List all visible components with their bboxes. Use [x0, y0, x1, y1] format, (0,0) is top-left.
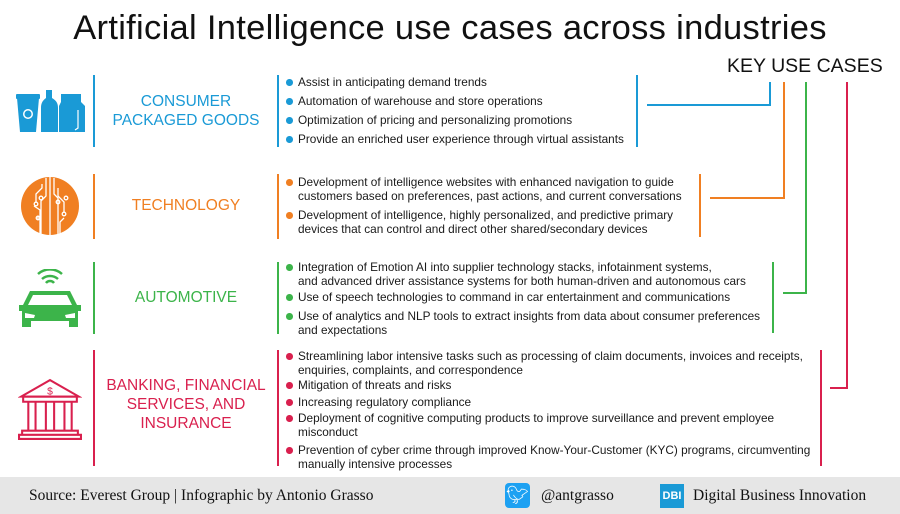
twitter handle: @antgrasso	[541, 487, 614, 504]
bullets: automotive: Use of speech technologies to command in car entertainment and communications	[298, 290, 730, 304]
bullets: cpg: Provide an enriched user experience through virtual assistants	[298, 132, 624, 146]
category label	[106, 377, 266, 432]
bullets: bfsi: Mitigation of threats and risks	[298, 378, 451, 392]
category label	[112, 93, 260, 129]
icon: dbi logo: DBI	[663, 490, 681, 502]
bullets: automotive: and expectations	[298, 323, 387, 337]
icon: twitter: 🐦︎	[506, 485, 529, 506]
category label: BANKING, FINANCIAL	[106, 377, 266, 394]
category label: PACKAGED GOODS	[112, 112, 260, 129]
bullets: bfsi: manually intensive processes	[298, 457, 452, 471]
panel: banking financial services insurance	[18, 350, 279, 466]
bullets: cpg: Optimization of pricing and personalizing promotions	[298, 113, 572, 127]
icon: circuit circle	[21, 177, 79, 235]
icon: dbi logo	[660, 484, 684, 508]
bullets: bfsi: enquiries, complaints, and correspondence	[298, 363, 523, 377]
bullets: cpg: Assist in anticipating demand trends	[298, 75, 487, 89]
bullets: cpg	[286, 75, 624, 146]
panel: technology	[21, 174, 279, 239]
icon: cpg products	[16, 90, 85, 132]
category label: AUTOMOTIVE	[135, 289, 237, 306]
bullets: technology: devices that can control and direct other shared/secondary devices	[298, 222, 648, 236]
bullets: technology	[286, 175, 682, 236]
bullets: technology: customers based on preferences, past actions, and current conversations	[298, 189, 682, 203]
bullets: automotive	[286, 260, 760, 337]
category label: CONSUMER	[141, 93, 231, 110]
dbi name: Digital Business Innovation	[693, 487, 866, 504]
bullets: bfsi: Prevention of cyber crime through improved Know-Your-Customer (KYC) programs, circumventing	[298, 443, 810, 457]
bullets: automotive: and advanced driver assistance systems for both human-driven and autonomous cars	[298, 274, 746, 288]
bullets: bfsi: Streamlining labor intensive tasks such as processing of claim documents, invoices and receipts,	[298, 349, 803, 363]
panel: consumer packaged goods	[16, 75, 279, 147]
title: Artificial Intelligence use cases across industries	[73, 9, 827, 47]
icon: bank	[18, 378, 82, 440]
icon: connected car	[19, 269, 81, 327]
bullets: bfsi: misconduct	[298, 425, 358, 439]
source text: Source: Everest Group | Infographic by Antonio Grasso	[29, 487, 373, 504]
bullets: technology: Development of intelligence websites with enhanced navigation to guide	[298, 175, 674, 189]
bullets: bfsi: Deployment of cognitive computing products to improve surveillance and prevent employee	[298, 411, 774, 425]
bullets: bfsi	[286, 349, 810, 471]
category label: INSURANCE	[140, 415, 232, 432]
category label: TECHNOLOGY	[132, 197, 240, 214]
category label: SERVICES, AND	[127, 396, 245, 413]
bullets: bfsi: Increasing regulatory compliance	[298, 395, 471, 409]
bullets: cpg: Automation of warehouse and store operations	[298, 94, 543, 108]
key use cases heading: KEY USE CASES	[727, 55, 883, 77]
footer	[0, 477, 900, 514]
bullets: automotive: Integration of Emotion AI into supplier technology stacks, infotainment systems,	[298, 260, 712, 274]
icon: bank: $	[47, 387, 53, 398]
bullets: technology: Development of intelligence, highly personalized, and predictive primary	[298, 208, 673, 222]
panel: automotive	[19, 262, 279, 334]
bullets: automotive: Use of analytics and NLP tools to extract insights from data about consumer preferences	[298, 309, 760, 323]
